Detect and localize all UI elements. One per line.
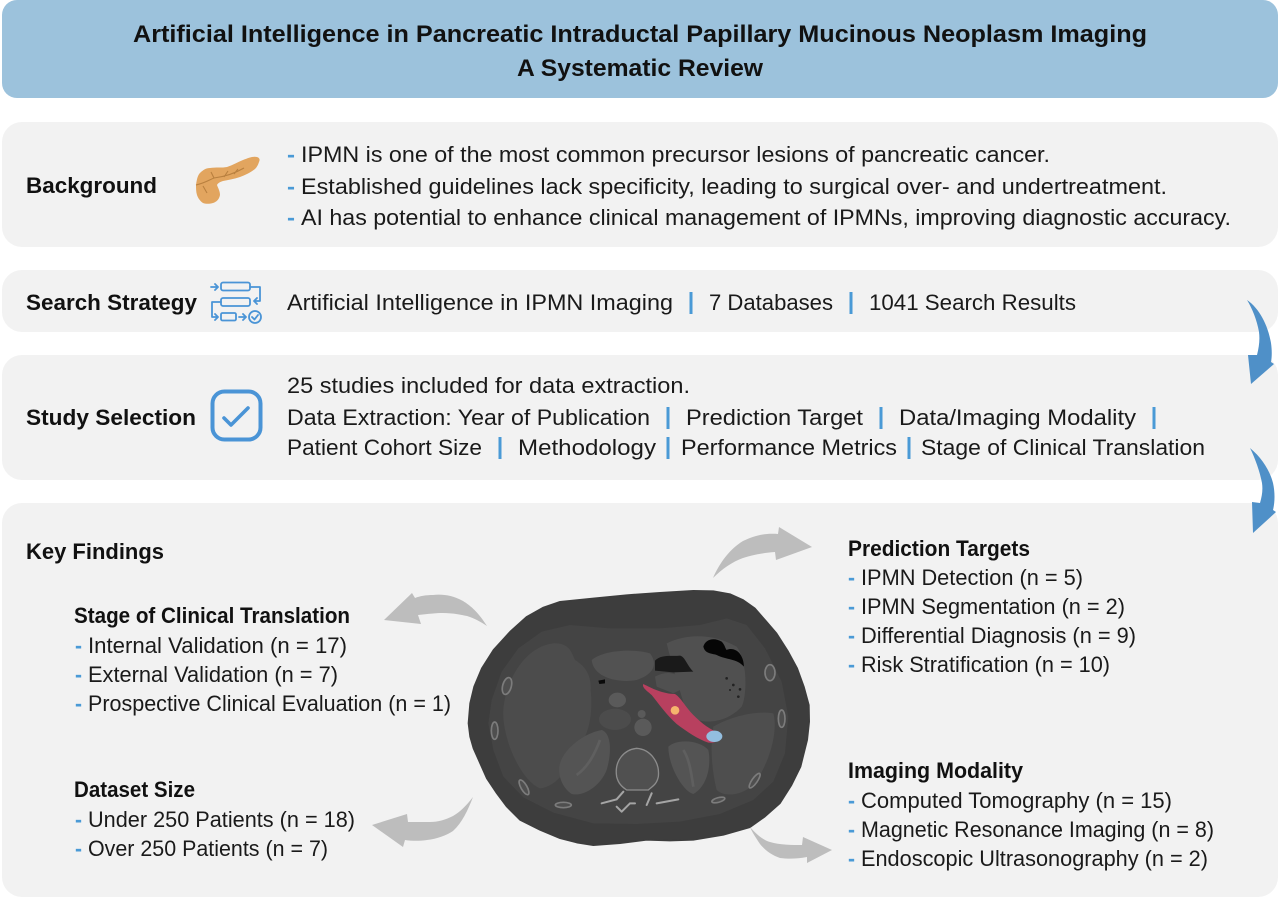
list: prediction targets: IPMN Detection (n = 5) — [861, 565, 1083, 590]
list: imaging modality: Computed Tomography (n = 15) — [861, 788, 1172, 813]
pancreas overlay — [643, 684, 722, 743]
lesion: orange cyst — [671, 706, 679, 715]
list: prediction targets: - — [848, 623, 855, 648]
background bullet points: - — [287, 142, 295, 167]
panel: search strategy — [2, 270, 1278, 332]
list: prediction targets: Differential Diagnosis (n = 9) — [861, 623, 1136, 648]
study selection text: 25 studies included for data extraction. — [287, 373, 690, 398]
list: prediction targets: IPMN Segmentation (n = 2) — [861, 594, 1125, 619]
list: imaging modality: - — [848, 788, 855, 813]
study selection text: Data/Imaging Modality — [899, 405, 1136, 430]
lesion: blue cyst — [706, 731, 722, 742]
list: prediction targets: - — [848, 594, 855, 619]
title banner — [2, 0, 1278, 98]
panel: background — [2, 122, 1278, 247]
background bullet points: Established guidelines lack specificity, leading to surgical over- and undertreatment. — [301, 174, 1167, 199]
background bullet points: - — [287, 205, 295, 230]
list: imaging modality — [848, 758, 1214, 871]
icon: workflow — [211, 282, 261, 323]
background bullet points: AI has potential to enhance clinical management of IPMNs, improving diagnostic accuracy. — [301, 205, 1231, 230]
list: dataset size — [74, 777, 355, 861]
list: prediction targets: Risk Stratification (n = 10) — [861, 652, 1110, 677]
list: dataset size: Under 250 Patients (n = 18) — [88, 807, 355, 832]
search strategy text: 7 Databases — [709, 290, 833, 315]
icon: checkbox — [212, 392, 260, 440]
panel: key findings — [2, 503, 1278, 897]
list: dataset size: - — [75, 807, 82, 832]
list: prediction targets: Prediction Targets — [848, 536, 1030, 561]
study selection text: Data Extraction: Year of Publication — [287, 405, 650, 430]
heading: key findings: Key Findings — [26, 539, 164, 564]
study selection text: Methodology — [518, 435, 656, 460]
CT scan image — [468, 591, 809, 845]
study selection text: Stage of Clinical Translation — [921, 435, 1205, 460]
title banner: Artificial Intelligence in Pancreatic Intraductal Papillary Mucinous Neoplasm Imaging — [133, 21, 1147, 48]
list: prediction targets: - — [848, 565, 855, 590]
list: dataset size: Dataset Size — [74, 777, 195, 802]
list: stage of clinical translation: Prospective Clinical Evaluation (n = 1) — [88, 691, 451, 716]
study selection text: Performance Metrics — [681, 435, 897, 460]
icon: pancreas — [196, 157, 260, 204]
background bullet points: - — [287, 174, 295, 199]
list: dataset size: - — [75, 836, 82, 861]
arrow: to stage of clinical translation — [384, 593, 487, 626]
list: prediction targets — [848, 536, 1136, 677]
list: stage of clinical translation: - — [75, 633, 82, 658]
arrow: to imaging modality — [750, 827, 832, 863]
list: stage of clinical translation: External Validation (n = 7) — [88, 662, 338, 687]
list: stage of clinical translation — [74, 603, 451, 716]
heading: background: Background — [26, 173, 157, 198]
arrow: to dataset size — [372, 797, 473, 847]
list: imaging modality: - — [848, 846, 855, 871]
title banner: A Systematic Review — [517, 55, 763, 82]
list: stage of clinical translation: Internal Validation (n = 17) — [88, 633, 347, 658]
list: dataset size: Over 250 Patients (n = 7) — [88, 836, 328, 861]
background bullet points: IPMN is one of the most common precursor lesions of pancreatic cancer. — [301, 142, 1050, 167]
list: stage of clinical translation: Stage of Clinical Translation — [74, 603, 350, 628]
panel: study selection — [2, 355, 1278, 480]
list: stage of clinical translation: - — [75, 691, 82, 716]
list: imaging modality: Endoscopic Ultrasonography (n = 2) — [861, 846, 1208, 871]
heading: search strategy: Search Strategy — [26, 290, 198, 315]
arrow: study selection to key findings — [1250, 448, 1276, 533]
study selection text: Prediction Target — [686, 405, 863, 430]
arrow: search strategy to study selection — [1247, 300, 1274, 384]
list: imaging modality: Magnetic Resonance Imaging (n = 8) — [861, 817, 1214, 842]
study selection text: Patient Cohort Size — [287, 435, 482, 460]
list: imaging modality: Imaging Modality — [848, 758, 1024, 783]
search strategy text — [287, 290, 1076, 315]
heading: study selection: Study Selection — [26, 405, 196, 430]
study selection text — [287, 373, 1205, 460]
background bullet points — [287, 142, 1231, 230]
search strategy text: Artificial Intelligence in IPMN Imaging — [287, 290, 673, 315]
list: prediction targets: - — [848, 652, 855, 677]
list: stage of clinical translation: - — [75, 662, 82, 687]
list: imaging modality: - — [848, 817, 855, 842]
arrow: to prediction targets — [713, 527, 812, 578]
search strategy text: 1041 Search Results — [869, 290, 1076, 315]
